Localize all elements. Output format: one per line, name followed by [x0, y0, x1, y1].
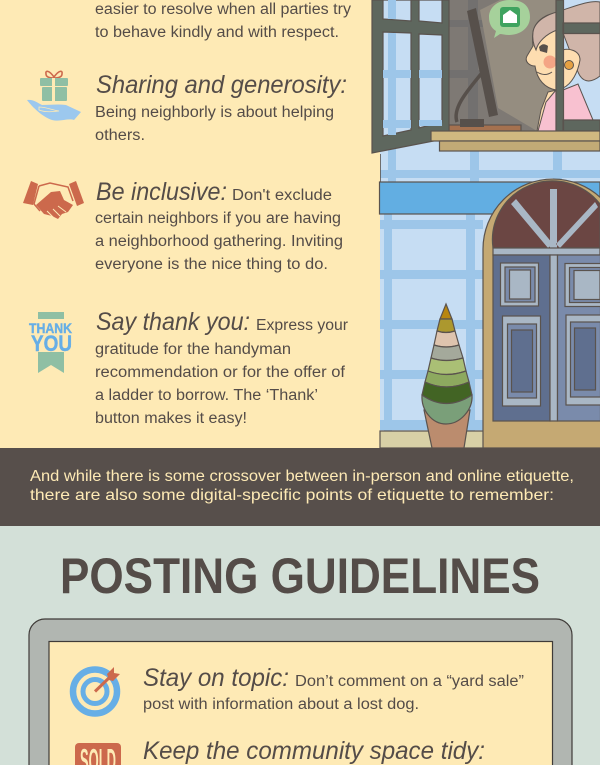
block: be inclusive: a neighborhood gathering. Inviting	[95, 233, 343, 250]
intro text continued: to behave kindly and with respect.	[95, 24, 339, 41]
laptop frame	[29, 619, 572, 765]
block: sharing and generosity	[95, 71, 347, 144]
block: be inclusive: Don't exclude	[232, 187, 332, 204]
monitor stand	[456, 74, 481, 122]
icon: thank you ribbon	[29, 312, 72, 373]
blue awning band	[380, 182, 600, 214]
block: stay on topic	[143, 664, 524, 713]
speech bubble with house icon	[489, 0, 530, 38]
right window frame	[556, 0, 600, 131]
block: be inclusive: Be inclusive:	[96, 178, 227, 206]
dark transition band: And while there is some crossover between in-person and online etiquette,	[30, 468, 574, 485]
block: say thank you: recommendation or for the offer of	[95, 364, 346, 381]
open left window casement	[372, 0, 449, 153]
right door leaf	[558, 255, 600, 421]
fanlight	[492, 181, 600, 248]
grandmother at the computer	[526, 2, 600, 131]
fanlight spokes	[511, 189, 598, 248]
panel: posting guidelines	[0, 526, 600, 765]
block: be inclusive: certain neighbors if you are having	[95, 210, 341, 227]
desk	[449, 125, 521, 131]
block: stay on topic: post with information about a lost dog.	[143, 696, 419, 713]
potted plant	[422, 304, 472, 448]
block: say thank you: Express your	[256, 317, 348, 334]
icon: handshake	[23, 181, 84, 219]
block: sharing and generosity: Being neighborly is about helping	[95, 104, 334, 121]
block: keep the community space tidy: Keep the community space tidy:	[143, 737, 485, 765]
dark transition band: there are also some digital-specific points of etiquette to remember:	[30, 487, 554, 504]
block: sharing and generosity: Sharing and generosity:	[96, 71, 347, 99]
block: say thank you: button makes it easy!	[95, 410, 247, 427]
icon: gift on a hand	[27, 71, 81, 121]
window sill	[431, 131, 600, 151]
illustration: building with window and door	[372, 0, 600, 448]
block: stay on topic: Don’t comment on a “yard sale”	[295, 673, 524, 690]
ground strip	[380, 431, 484, 448]
monitor screen	[467, 8, 498, 117]
door	[483, 179, 600, 448]
block: be inclusive	[95, 178, 343, 273]
room interior with monitor	[449, 0, 557, 131]
icon: target with arrow	[73, 667, 120, 714]
door centre post	[550, 255, 558, 421]
heading: POSTING GUIDELINES	[60, 548, 540, 604]
block: stay on topic: Stay on topic:	[143, 664, 289, 692]
laptop screen	[49, 642, 552, 765]
block: say thank you: gratitude for the handyman	[95, 341, 291, 358]
intro text continued	[95, 1, 351, 41]
background: cream panel	[0, 0, 600, 448]
block: be inclusive: everyone is the nice thing to do.	[95, 256, 328, 273]
icon: sold sign	[75, 742, 121, 765]
left door leaf	[493, 255, 550, 421]
dark transition band	[0, 448, 600, 526]
intro text continued: easier to resolve when all parties try	[95, 1, 351, 18]
monitor base	[460, 119, 484, 127]
building wall	[380, 0, 600, 431]
block: say thank you: Say thank you:	[96, 308, 250, 336]
block: sharing and generosity: others.	[95, 127, 145, 144]
door arch	[483, 179, 600, 448]
icon: thank you ribbon: YOU	[31, 331, 72, 356]
block: say thank you: a ladder to borrow. The ‘Thank’	[95, 387, 318, 404]
block: say thank you	[95, 308, 348, 427]
icon: thank you ribbon: THANK	[29, 321, 72, 336]
